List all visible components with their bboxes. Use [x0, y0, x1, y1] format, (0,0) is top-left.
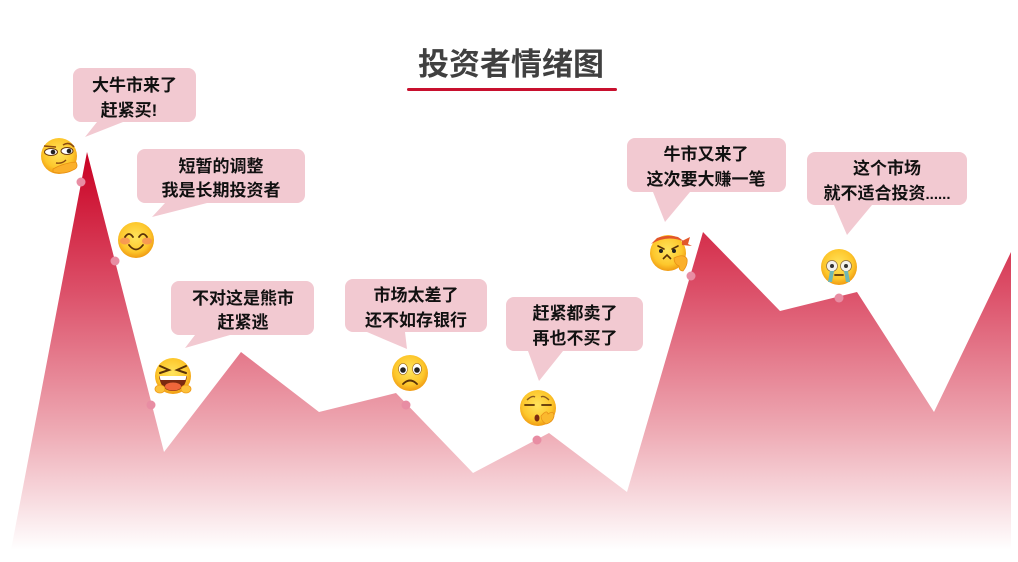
callout: 赶紧都卖了 — [506, 297, 643, 381]
callout: 不对这是熊市 — [171, 281, 314, 348]
callout: 赶紧都卖了: 赶紧都卖了 — [532, 304, 618, 323]
callout: 市场太差了 — [345, 279, 487, 349]
mountain area chart — [11, 152, 1011, 550]
callout: 不对这是熊市: 不对这是熊市 — [192, 288, 294, 308]
icon: smirking thinking face — [41, 138, 77, 174]
callout: 市场太差了: 还不如存银行 — [365, 310, 467, 330]
icon: worried face — [392, 355, 428, 391]
icon: determined face with headband — [650, 235, 692, 271]
icon: smiling face — [118, 222, 154, 258]
callout: 这个市场: 这个市场 — [853, 158, 921, 178]
callout: 这个市场: 就不适合投资...... — [823, 183, 951, 203]
callout: 牛市又来了 — [627, 138, 786, 222]
callout: 大牛市来了: 赶紧买! — [101, 101, 157, 120]
callout: 短暂的调整: 短暂的调整 — [178, 157, 264, 176]
callout: 赶紧都卖了: 再也不买了 — [532, 329, 618, 348]
callout: 牛市又来了: 牛市又来了 — [664, 144, 748, 164]
callout: 短暂的调整: 我是长期投资者 — [162, 180, 280, 200]
icon: crying face — [821, 249, 857, 285]
callout: 这个市场 — [807, 152, 967, 235]
icon: laughing crying face — [155, 358, 191, 394]
chart markers — [76, 178, 844, 444]
callout: 牛市又来了: 这次要大赚一笔 — [646, 169, 766, 189]
title underline — [407, 88, 617, 91]
callout: 短暂的调整 — [137, 149, 305, 217]
callout: 不对这是熊市: 赶紧逃 — [218, 313, 268, 332]
title: 投资者情绪图 — [418, 47, 604, 82]
icon: kissing heart face — [520, 390, 556, 426]
callout: 大牛市来了 — [73, 68, 196, 137]
callout: 市场太差了: 市场太差了 — [374, 285, 458, 305]
callout: 大牛市来了: 大牛市来了 — [92, 75, 177, 95]
